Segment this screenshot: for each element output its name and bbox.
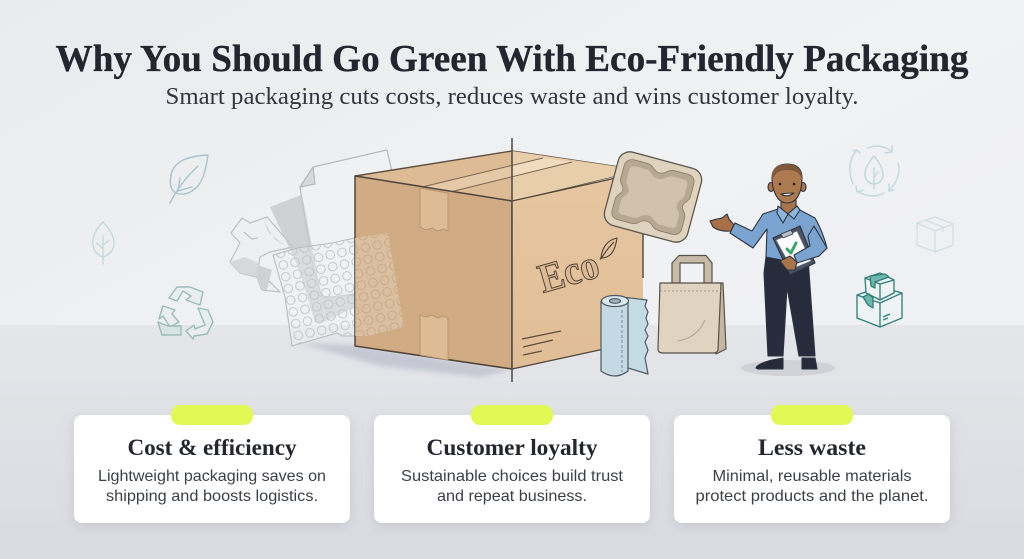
- card body: Minimal, reusable materials: [712, 468, 912, 485]
- shirt: [730, 209, 827, 263]
- crumpled paper: [230, 217, 293, 292]
- bubble wrap seen through box: [355, 233, 404, 336]
- collar: [777, 206, 800, 223]
- handling lines: [522, 331, 561, 355]
- card: Less waste: [674, 405, 950, 523]
- icon: stacked boxes: [857, 273, 902, 327]
- plastic film roll: [601, 296, 648, 376]
- center vertical line: [511, 138, 513, 382]
- bag gusset: [716, 283, 726, 354]
- subtitle: Smart packaging cuts costs, reduces waste and wins customer loyalty.: [166, 84, 858, 110]
- tote bag: [658, 256, 726, 354]
- ground shadow: [741, 360, 835, 376]
- icon: outline leaf: [170, 155, 208, 203]
- head: [768, 164, 806, 203]
- white paper sheet: [300, 150, 392, 298]
- box right face: [512, 172, 643, 369]
- bubble wrap sheet: [273, 233, 404, 346]
- upper tape: [420, 188, 448, 231]
- icon: faint leaf: [93, 222, 114, 264]
- box top face: [355, 151, 640, 201]
- person: [710, 164, 835, 376]
- card body: Sustainable choices build trust: [401, 468, 624, 485]
- molded pulp tray: [602, 149, 704, 245]
- background wall: [0, 0, 1024, 325]
- card heading: Less waste: [758, 435, 866, 460]
- hand on clipboard: [780, 256, 797, 270]
- card body: shipping and boosts logistics.: [106, 488, 318, 505]
- Eco stamp: Eco: [533, 241, 604, 302]
- highlight tab: [471, 405, 553, 425]
- tape on top: [422, 158, 572, 192]
- icon: cycle leaf: [850, 146, 899, 196]
- bag body: [658, 283, 721, 353]
- cardboard box: [355, 138, 643, 382]
- card: Customer loyalty: [374, 405, 650, 523]
- Eco leaf: [600, 238, 617, 259]
- title: Why You Should Go Green With Eco-Friendly Packaging: [56, 38, 968, 80]
- grey folded sheet: [270, 195, 355, 323]
- card body: and repeat business.: [437, 488, 587, 505]
- icon: recycling arrows: [158, 287, 213, 339]
- card: Cost & efficiency: [74, 405, 350, 523]
- trousers: [764, 257, 815, 356]
- box front face: [355, 176, 512, 369]
- lower tape: [420, 315, 448, 360]
- roll body: [601, 301, 628, 376]
- bag handles: [672, 256, 712, 283]
- neck: [781, 198, 796, 215]
- highlight tab: [171, 405, 253, 425]
- packing materials group: [230, 150, 404, 346]
- left hand: [710, 214, 734, 231]
- film sheet: [622, 297, 648, 374]
- card body: protect products and the planet.: [696, 488, 928, 505]
- card heading: Cost & efficiency: [128, 435, 297, 460]
- icon: faint box: [917, 217, 953, 252]
- forearm: [794, 226, 827, 263]
- background floor: [0, 325, 1024, 559]
- box shadow on floor: [300, 343, 512, 377]
- card heading: Customer loyalty: [426, 435, 598, 460]
- green check: [787, 243, 796, 253]
- shoes: [756, 358, 817, 369]
- clipboard: [773, 226, 815, 275]
- card body: Lightweight packaging saves on: [98, 468, 326, 485]
- highlight tab: [771, 405, 853, 425]
